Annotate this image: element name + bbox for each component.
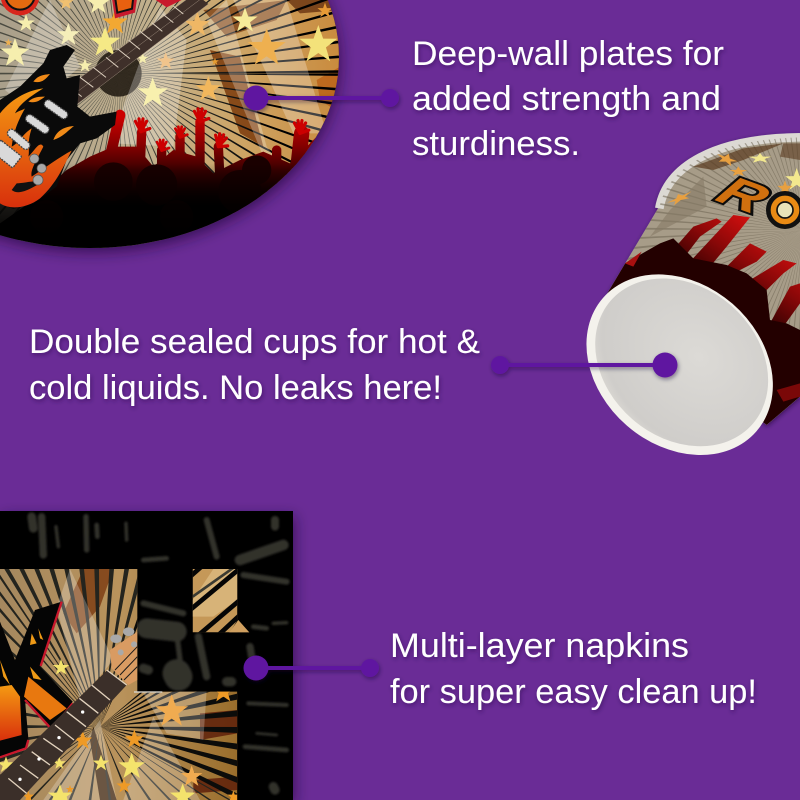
crowd	[0, 107, 316, 248]
napkin stars	[0, 659, 237, 800]
text: cups: Double sealed cups for hot &	[29, 323, 480, 361]
napkin sheet	[0, 511, 293, 800]
text: plates: sturdiness.	[412, 125, 580, 163]
cup logo text: R	[703, 169, 786, 221]
cup print	[603, 113, 800, 425]
plate artwork	[0, 0, 339, 248]
napkin guitar	[0, 627, 137, 800]
text: plates: added strength and	[412, 80, 721, 118]
guitar	[0, 0, 208, 209]
text: napkins: for super easy clean up!	[390, 673, 757, 711]
text: plates: Deep-wall plates for	[412, 35, 724, 73]
plate disc	[0, 0, 339, 248]
text: plates	[412, 35, 724, 163]
napkin light beams	[43, 569, 207, 800]
cup base	[550, 237, 800, 492]
connector: plate	[244, 86, 399, 110]
text: napkins	[390, 627, 757, 711]
napkin letter K	[0, 602, 73, 757]
napkin small window	[192, 569, 238, 632]
cup logo second letter	[768, 193, 800, 227]
connector: napkin	[244, 656, 379, 680]
cup body	[603, 134, 800, 425]
panel: napkin	[0, 511, 293, 800]
text: cups: cold liquids. No leaks here!	[29, 369, 442, 407]
light beams	[5, 0, 324, 156]
panel: cup	[586, 132, 800, 455]
napkin artwork	[0, 517, 287, 800]
stars	[0, 0, 337, 106]
text: napkins: Multi-layer napkins	[390, 627, 689, 665]
logo fragments	[1, 0, 185, 18]
panel: plate	[0, 0, 343, 273]
silhouettes	[32, 517, 287, 790]
text: cups	[29, 323, 480, 407]
napkin corner triangle	[229, 620, 249, 632]
connector: cup	[491, 352, 678, 378]
napkin fold edge	[134, 691, 162, 693]
picture window	[0, 569, 237, 800]
